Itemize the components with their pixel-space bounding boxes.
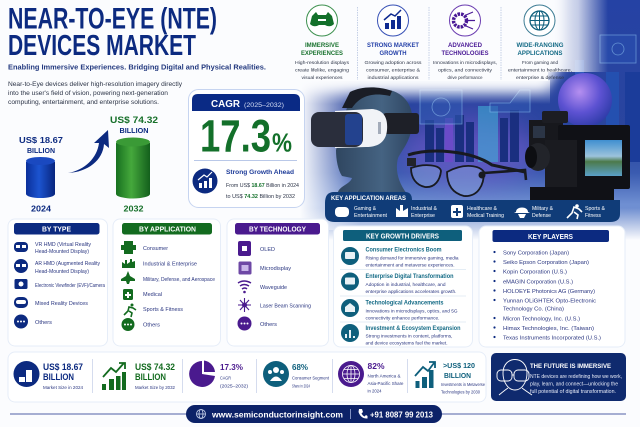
heading: BY APPLICATION — [139, 226, 196, 234]
feature: strong market growth — [364, 5, 422, 81]
stat: metaverse investment: BILLION — [444, 371, 471, 380]
stat: CAGR pie — [189, 360, 248, 390]
list: Others — [35, 320, 52, 326]
year labels — [31, 204, 144, 214]
player list: Micron Technology, Inc. (U.S.) — [503, 316, 580, 322]
heading: KEY PLAYERS — [528, 234, 573, 241]
growth text: From US$ 18.67 Billion in 2024 — [226, 183, 299, 189]
stat: 2032 market size: Market Size by 2032 — [135, 385, 175, 391]
item: sports: Sports & — [585, 206, 606, 212]
stat: regional share: Asia-Pacific Share — [368, 381, 404, 387]
growth text: Strong Growth Ahead — [226, 169, 294, 176]
intro paragraph: computing, entertainment, and enterprise solutions. — [8, 100, 159, 106]
heading: BY TYPE — [42, 226, 71, 234]
stat: consumer share — [263, 361, 330, 390]
player list: HOLOEYE Photonics AG (Germany) — [503, 289, 595, 295]
list: VR HMD (Virtual Reality — [35, 242, 91, 248]
panel: by application — [113, 219, 220, 346]
feature: advanced technologies: TECHNOLOGIES — [442, 50, 489, 57]
feature: wide-ranging applications: entertainment to healthcare, — [508, 68, 572, 74]
stat: consumer share: Share in 2024 — [292, 384, 310, 390]
panel: key growth drivers — [334, 226, 472, 347]
year labels: 2024 — [31, 204, 52, 214]
heading — [492, 230, 609, 242]
stat: regional share: 82% — [368, 362, 384, 371]
list — [143, 246, 215, 328]
heading: KEY GROWTH DRIVERS — [366, 234, 439, 240]
icon: VR goggles — [306, 5, 338, 36]
driver 1: Consumer Electronics Boom — [366, 246, 442, 254]
panel: key statistics — [8, 352, 486, 402]
feature: advanced technologies: Innovations in microdisplays, — [433, 60, 497, 66]
globe — [558, 73, 612, 127]
feature: strong market growth: Growing adoption across — [364, 60, 422, 66]
driver 3: Technological Advancements — [366, 300, 444, 306]
icons — [238, 241, 252, 330]
icon: bar growth — [378, 5, 408, 36]
list: Head-Mounted Display) — [35, 269, 89, 275]
callout: the future is immersive: THE FUTURE IS IMMERSIVE — [530, 363, 612, 370]
stat: metaverse investment: Investments in Metaverse — [441, 382, 485, 387]
growth text: to US$ 74.32 Billion by 2032 — [226, 194, 295, 200]
item: gaming: Entertainment — [354, 213, 388, 219]
driver 1 — [366, 246, 459, 268]
feature: wide-ranging applications — [508, 5, 572, 81]
feature: immersive experiences — [295, 5, 350, 81]
2024 cylinder — [26, 157, 55, 198]
feature: immersive experiences: EXPERIENCES — [301, 50, 344, 57]
CAGR header: CAGR — [211, 99, 241, 110]
driver 3: Innovations in microdisplays, optics, and 5G — [366, 308, 458, 314]
2032 label: US$ 74.32 — [110, 115, 158, 125]
2032 label: BILLION — [120, 128, 148, 135]
CAGR value: 17.3 — [200, 110, 271, 162]
key application areas bar: KEY APPLICATION AREAS — [331, 195, 406, 202]
intro paragraph — [8, 82, 182, 106]
intro paragraph: Near-to-Eye devices deliver high-resolution imagery directly — [8, 82, 182, 88]
list: Others — [260, 322, 277, 328]
list: Waveguide — [260, 285, 287, 291]
item: sports: Fitness — [585, 213, 601, 219]
feature: strong market growth: GROWTH — [380, 50, 407, 57]
stat: 2024 market size — [14, 361, 83, 391]
growth text — [226, 169, 299, 200]
feature: wide-ranging applications: APPLICATIONS — [518, 50, 563, 57]
list: Consumer — [143, 246, 168, 252]
list: Mixed Reality Devices — [35, 301, 88, 307]
driver 2 — [366, 273, 456, 295]
stat: regional share — [338, 361, 404, 394]
VR headset on mannequin head — [311, 87, 419, 194]
list: Head-Mounted Display) — [35, 249, 89, 255]
callout: the future is immersive — [491, 353, 626, 401]
item: military: Military & — [532, 206, 554, 212]
item: military: Defense — [532, 213, 551, 219]
stat: 2024 market size: Market Size in 2024 — [43, 385, 83, 391]
player list: Himax Technologies, Inc. (Taiwan) — [503, 326, 594, 332]
player list: Texas Instruments Incorporated (U.S.) — [503, 336, 601, 342]
feature: immersive experiences: High-resolution displays — [295, 60, 350, 66]
2032 cylinder — [116, 138, 150, 198]
stat: CAGR pie: 17.3% — [220, 363, 243, 372]
icons — [341, 247, 359, 342]
driver 4: Investment & Ecosystem Expansion — [366, 325, 461, 332]
footer contact bar: +91 8087 99 2013 — [370, 410, 433, 420]
list: OLED — [260, 247, 275, 253]
cylinder chart: market growth — [19, 115, 158, 214]
item: gaming — [335, 206, 388, 219]
callout: the future is immersive: NTE devices are redefining how we work, — [530, 374, 622, 380]
driver 2: Enterprise Digital Transformation — [366, 273, 454, 280]
item: industrial: Industrial & — [411, 206, 438, 212]
feature: strong market growth: consumer, enterprise & — [366, 68, 421, 74]
icon: phone — [358, 409, 368, 419]
title: NEAR-TO-EYE (NTE) — [8, 2, 217, 36]
heading: BY TECHNOLOGY — [249, 226, 306, 234]
icon: gear circuit — [450, 5, 480, 36]
key application areas bar — [325, 192, 620, 222]
growth arrow — [68, 130, 109, 173]
list: Others — [143, 322, 160, 328]
list: Medical — [143, 292, 162, 298]
title — [8, 2, 217, 62]
2024 label: US$ 18.67 — [19, 135, 63, 145]
feature: advanced technologies: optics, and connectivity — [438, 68, 493, 74]
list: Military, Defense, and Aerospace — [143, 277, 215, 283]
driver 3: connectivity enhance performance. — [366, 316, 440, 322]
panel: by type — [8, 219, 108, 346]
feature: immersive experiences: create lifelike, engaging — [295, 68, 349, 74]
item: healthcare: Medical Training — [467, 213, 504, 219]
feature: wide-ranging applications: enterprise & defense — [516, 75, 564, 81]
2024 label — [19, 135, 63, 155]
icon: globe — [524, 5, 555, 36]
stat: CAGR pie: CAGR — [220, 376, 231, 382]
stat: 2032 market size — [102, 362, 175, 391]
driver 2: enterprise applications accelerates growth. — [366, 289, 456, 295]
stat: metaverse investment: >US$ 120 — [443, 361, 475, 370]
driver 4: and device ecosystems fuel the market. — [366, 340, 448, 346]
stat: 2024 market size: US$ 18.67 — [43, 362, 83, 372]
feature: strong market growth: industrial applications — [368, 75, 419, 81]
list — [35, 242, 105, 326]
intro paragraph: into the user's field of vision, powering next-generation — [8, 91, 168, 97]
stat: CAGR pie: (2025–2032) — [220, 384, 248, 390]
AR smart glasses — [407, 151, 526, 196]
item: gaming: Gaming & — [354, 206, 377, 212]
stat: 2032 market size: US$ 74.32 — [135, 362, 175, 372]
cinema camera with display — [525, 111, 630, 200]
2024 label: BILLION — [27, 148, 55, 155]
driver 2: Adoption in industrial, healthcare, and — [366, 282, 446, 288]
panel: key players — [479, 226, 625, 347]
player list: Technology Co. (China) — [503, 306, 564, 312]
list: Industrial & Enterprise — [143, 262, 197, 268]
player list: Sony Corporation (Japan) — [503, 250, 569, 256]
list: Laser Beam Scanning — [260, 304, 311, 310]
footer contact bar — [10, 405, 626, 423]
item: healthcare: Healthcare & — [467, 206, 498, 212]
icon: web globe — [196, 410, 206, 418]
feature: wide-ranging applications: From gaming and — [522, 60, 558, 66]
stat: 2032 market size: BILLION — [135, 372, 166, 382]
driver 4: Strong investments in content, platforms, — [366, 334, 452, 340]
2032 label — [110, 115, 158, 135]
stat: 2024 market size: BILLION — [43, 372, 74, 382]
white fade over the top of the scene — [280, 0, 562, 90]
panel: CAGR — [188, 90, 304, 208]
title: DEVICES MARKET — [8, 30, 196, 62]
player list: Kopin Corporation (U.S.) — [503, 270, 567, 276]
driver 4 — [366, 325, 461, 346]
callout: the future is immersive: full potential of digital transformation. — [530, 389, 616, 395]
city skyline — [425, 60, 640, 162]
bullets — [493, 251, 496, 338]
icons — [14, 242, 28, 328]
item: industrial — [396, 205, 438, 219]
CAGR value: % — [272, 128, 292, 158]
footer contact bar: www.semiconductorinsight.com — [211, 410, 343, 420]
player list: eMAGIN Corporation (U.S.) — [503, 280, 573, 286]
list — [260, 247, 311, 328]
list: Microdisplay — [260, 266, 291, 272]
subtitle: Enabling Immersive Experiences. Bridging Digital and Physical Realities. — [8, 62, 266, 72]
year labels: 2032 — [124, 204, 144, 214]
feature: advanced technologies: ADVANCED — [448, 42, 482, 49]
stat: regional share: North America & — [368, 374, 401, 380]
panel: by technology — [227, 219, 328, 346]
player list — [503, 250, 601, 342]
hero image: immersive city scene with devices — [280, 0, 640, 240]
driver 3 — [366, 300, 458, 322]
item: sports — [567, 204, 606, 219]
stat: consumer share: 68% — [292, 363, 308, 372]
callout: the future is immersive: play, learn, and connect—unlocking the — [530, 382, 618, 388]
CAGR header — [192, 94, 300, 111]
driver 1: entertainment and metaverse experiences. — [366, 262, 454, 268]
feature: advanced technologies: drive performance — [448, 75, 483, 81]
player list: Seiko Epson Corporation (Japan) — [503, 260, 589, 266]
stat: metaverse investment — [415, 361, 485, 394]
stat: metaverse investment: Technologies by 2030 — [441, 390, 480, 394]
holographic panels — [420, 35, 636, 124]
feature: immersive experiences: IMMERSIVE — [305, 42, 340, 49]
stat: consumer share: Consumer Segment — [292, 376, 330, 382]
driver 1: Rising demand for immersive gaming, media — [366, 256, 459, 262]
list: AR HMD (Augmented Reality — [35, 261, 100, 267]
item: military — [514, 206, 554, 219]
stat: regional share: in 2024 — [368, 388, 382, 394]
list: Sports & Fitness — [143, 307, 183, 313]
icons — [121, 241, 136, 331]
CAGR header: (2025–2032) — [244, 102, 284, 109]
icon: growth chart — [192, 168, 218, 194]
item: healthcare — [451, 205, 504, 219]
icon: headset user — [497, 360, 532, 395]
list: Electronic Viewfinder (EVF)/Camera — [35, 283, 105, 289]
feature: immersive experiences: visual experiences — [302, 75, 343, 81]
feature: advanced technologies — [433, 5, 497, 81]
item: industrial: Enterprise — [411, 213, 435, 219]
player list: Yunnan OLiGHTEK Opto-Electronic — [503, 298, 596, 304]
feature: strong market growth: STRONG MARKET — [367, 42, 419, 49]
feature: wide-ranging applications: WIDE-RANGING — [516, 42, 564, 49]
